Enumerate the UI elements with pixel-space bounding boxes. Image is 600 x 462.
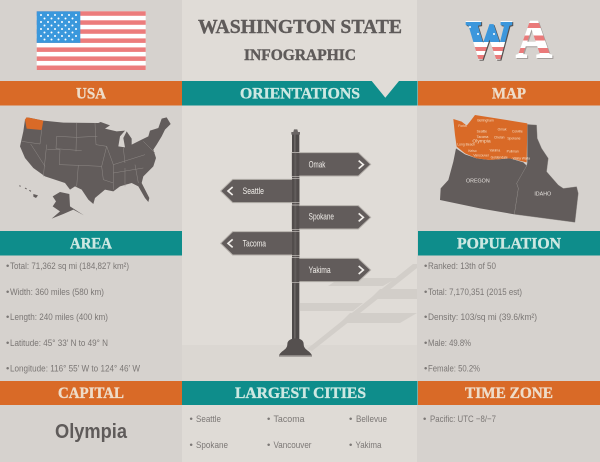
sign: Omak bbox=[292, 153, 371, 176]
heading: Largest cities: LARGEST CITIES bbox=[235, 385, 366, 402]
largest cities list: Bellevue bbox=[356, 414, 387, 425]
sign: Yakima: Yakima bbox=[309, 265, 331, 275]
largest cities list: • bbox=[267, 414, 270, 425]
post bbox=[279, 129, 312, 357]
heading: Area: AREA bbox=[70, 236, 112, 252]
area facts: Width: 360 miles (580 km) bbox=[10, 287, 104, 298]
area facts: Length: 240 miles (400 km) bbox=[10, 312, 108, 323]
heading: Largest cities bbox=[182, 381, 418, 405]
Idaho bbox=[514, 124, 578, 222]
city labels: Vancouver bbox=[473, 154, 490, 158]
Washington bbox=[453, 115, 527, 162]
population facts: Female: 50.2% bbox=[428, 364, 480, 374]
time zone text: • bbox=[423, 414, 426, 425]
heading: Time zone bbox=[418, 381, 600, 405]
title bbox=[198, 16, 402, 64]
heading: Capital: CAPITAL bbox=[58, 385, 124, 402]
largest cities list: • bbox=[190, 440, 193, 451]
largest cities list: • bbox=[190, 414, 193, 425]
population facts: • bbox=[424, 364, 427, 374]
heading: Time zone: TIME ZONE bbox=[465, 385, 553, 402]
area facts: • bbox=[6, 338, 9, 349]
largest cities list: Spokane bbox=[196, 440, 228, 451]
largest cities list: Seattle bbox=[196, 414, 221, 425]
area facts: • bbox=[6, 364, 9, 374]
heading: USA bbox=[0, 81, 182, 106]
icon: WA flag letters: A bbox=[517, 10, 553, 70]
icon: American flag bbox=[37, 11, 146, 70]
map: USA bbox=[19, 117, 171, 219]
city labels: Long Beach bbox=[457, 143, 475, 147]
city labels: Omak bbox=[498, 128, 507, 132]
sign: Spokane: Spokane bbox=[309, 211, 334, 221]
population facts: • bbox=[424, 338, 427, 349]
city labels: Walla Walla bbox=[513, 157, 530, 161]
sign: Spokane bbox=[292, 206, 371, 229]
signpost bbox=[221, 129, 371, 357]
Oregon bbox=[440, 148, 527, 214]
city labels: Forks bbox=[458, 124, 467, 128]
icon: WA flag letters: W bbox=[467, 10, 513, 70]
state name labels: OREGON bbox=[466, 179, 490, 185]
city labels: Pullman bbox=[507, 149, 519, 153]
title: INFOGRAPHIC bbox=[244, 47, 356, 64]
city labels: Olympia bbox=[472, 138, 491, 144]
sign: Seattle bbox=[221, 179, 299, 203]
largest cities list: Vancouver bbox=[274, 440, 312, 451]
time zone text: Pacific: UTC −8/−7 bbox=[430, 414, 496, 425]
heading: USA: USA bbox=[76, 86, 106, 102]
state name labels: IDAHO bbox=[534, 191, 551, 197]
city labels: Yakima bbox=[489, 149, 500, 153]
sign: Tacoma bbox=[221, 232, 299, 255]
post collars over the signs bbox=[292, 152, 300, 283]
icon: WA flag letters bbox=[466, 10, 553, 70]
population facts: Density: 103/sq mi (39.6/km²) bbox=[428, 312, 537, 323]
heading: Capital bbox=[0, 381, 182, 405]
title: WASHINGTON STATE bbox=[198, 16, 402, 38]
sign: Seattle: Seattle bbox=[243, 186, 264, 196]
largest cities list: Yakima bbox=[356, 440, 382, 451]
area facts: • bbox=[6, 312, 9, 323]
city labels: Spokane bbox=[507, 137, 521, 141]
largest cities list: • bbox=[267, 440, 270, 451]
population facts: • bbox=[424, 312, 427, 323]
population facts bbox=[424, 261, 537, 374]
population facts: • bbox=[424, 287, 427, 298]
area facts: Longitude: 116° 55′ W to 124° 46′ W bbox=[10, 364, 140, 374]
city labels: Colville bbox=[512, 130, 523, 134]
largest cities list: • bbox=[349, 414, 352, 425]
city labels: Goldendale bbox=[491, 156, 508, 160]
area facts: • bbox=[6, 287, 9, 298]
heading: Population bbox=[418, 231, 600, 256]
heading: Map: MAP bbox=[492, 86, 526, 102]
largest cities list: • bbox=[349, 440, 352, 451]
population facts: • bbox=[424, 261, 427, 272]
sign: Omak: Omak bbox=[309, 159, 326, 169]
state name labels bbox=[466, 179, 551, 197]
capital name: Olympia bbox=[55, 421, 128, 443]
area facts bbox=[6, 261, 140, 374]
heading: Map bbox=[418, 81, 600, 106]
heading: Orientations bbox=[182, 81, 418, 106]
sign: Yakima bbox=[292, 258, 371, 282]
area facts: Total: 71,362 sq mi (184,827 km²) bbox=[10, 261, 129, 272]
city labels: Seattle bbox=[477, 130, 487, 134]
sign: Tacoma: Tacoma bbox=[243, 239, 267, 249]
heading: Population: POPULATION bbox=[457, 236, 561, 252]
city labels: Chelan bbox=[494, 135, 505, 139]
heading: Area bbox=[0, 231, 182, 256]
heading: Orientations: ORIENTATIONS bbox=[240, 86, 360, 102]
population facts: Male: 49.8% bbox=[428, 338, 471, 349]
icon: WA flag letters: A bbox=[516, 10, 552, 70]
icon: WA flag letters: W bbox=[466, 10, 512, 70]
largest cities list: Tacoma bbox=[274, 414, 305, 425]
city labels: Bellingham bbox=[477, 119, 494, 123]
area facts: Latitude: 45° 33′ N to 49° N bbox=[10, 338, 108, 349]
city labels: Tacoma bbox=[477, 135, 488, 139]
shadow of signpost bbox=[300, 264, 417, 351]
area facts: • bbox=[6, 261, 9, 272]
map: Washington and neighbours bbox=[440, 115, 578, 222]
population facts: Total: 7,170,351 (2015 est) bbox=[428, 287, 522, 298]
population facts: Ranked: 13th of 50 bbox=[428, 261, 496, 272]
largest cities list bbox=[190, 414, 387, 451]
city labels: Kelso bbox=[468, 149, 477, 153]
city labels bbox=[457, 119, 530, 161]
